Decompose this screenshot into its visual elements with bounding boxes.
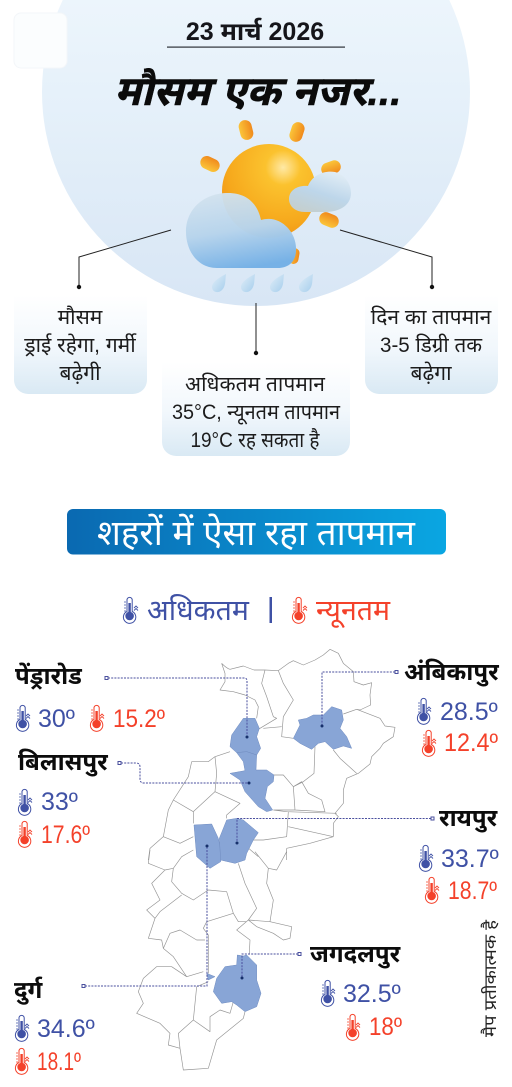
date underline bbox=[167, 46, 345, 48]
connector: Raipur bbox=[236, 817, 434, 844]
left pointer bbox=[77, 230, 171, 289]
panel: right note: बढ़ेगा bbox=[410, 361, 452, 385]
city: Raipur: 33.7º bbox=[441, 845, 499, 873]
map disclaimer: मैप प्रतीकात्मक है bbox=[479, 919, 500, 1037]
panel: left note: बढ़ेगी bbox=[59, 361, 101, 385]
city: Jagdalpur bbox=[310, 941, 402, 1041]
district: Pendra Road bbox=[230, 718, 261, 755]
district: Durg bbox=[194, 824, 222, 868]
city: Jagdalpur: जगदलपुर bbox=[310, 941, 401, 969]
center pointer bbox=[254, 303, 258, 355]
city: Pendra Road: 30º bbox=[38, 705, 75, 733]
city: Bilaspur bbox=[18, 748, 108, 849]
city: Pendra Road: पेंड्रारोड bbox=[15, 662, 82, 690]
district: Bilaspur bbox=[230, 752, 274, 812]
panel: center note: अधिकतम तापमान bbox=[185, 372, 325, 396]
big cloud bbox=[186, 193, 296, 268]
city: Durg: 34.6º bbox=[37, 1015, 95, 1043]
city: Ambikapur: 28.5º bbox=[440, 698, 498, 726]
district: Raipur bbox=[219, 818, 258, 863]
panel: center note: 19°C रह सकता है bbox=[190, 427, 320, 452]
city: Bilaspur: 33º bbox=[41, 788, 78, 816]
connector: Durg bbox=[82, 844, 208, 988]
panel: left note: ड्राई रहेगा, गर्मी bbox=[23, 333, 137, 357]
legend: न्यूनतम bbox=[316, 595, 391, 628]
faint rounded square bbox=[14, 13, 67, 68]
city: Jagdalpur: 32.5º bbox=[343, 980, 401, 1008]
panel: right note: 3-5 डिग्री तक bbox=[380, 333, 483, 357]
city: Bilaspur: 17.6º bbox=[41, 821, 90, 849]
city: Durg: 18.1º bbox=[37, 1048, 81, 1076]
map: Chhattisgarh districts bbox=[137, 649, 395, 1070]
panel: right note: दिन का तापमान bbox=[371, 305, 492, 329]
sun bbox=[222, 144, 316, 238]
city: Raipur: रायपुर bbox=[439, 805, 498, 833]
city: Durg: दुर्ग bbox=[14, 976, 43, 1005]
right pointer bbox=[340, 230, 434, 289]
sun rays bbox=[198, 119, 343, 265]
city: Jagdalpur: 18º bbox=[369, 1013, 402, 1041]
panel: center note: 35°C, न्यूनतम तापमान bbox=[172, 401, 340, 425]
title: मौसम एक नजर... bbox=[114, 68, 402, 114]
district: Jagdalpur bbox=[207, 955, 261, 1012]
city: Pendra Road: 15.2º bbox=[113, 705, 165, 733]
city: Raipur bbox=[419, 805, 499, 905]
rain drops bbox=[212, 274, 313, 292]
district: Ambikapur bbox=[293, 707, 352, 749]
icon: sun behind clouds with rain bbox=[186, 119, 351, 292]
connector: Jagdalpur bbox=[240, 952, 301, 980]
date: 23 मार्च 2026 bbox=[186, 17, 324, 46]
connector: Ambikapur bbox=[320, 670, 398, 728]
legend: अधिकतम bbox=[147, 594, 250, 627]
legend bbox=[123, 594, 391, 628]
city: Pendra Road bbox=[15, 662, 165, 733]
city: Durg bbox=[14, 976, 95, 1076]
panel: right note bbox=[365, 295, 498, 394]
background circle bbox=[42, 0, 470, 306]
city: Ambikapur: अंबिकापुर bbox=[404, 658, 499, 687]
small cloud bbox=[289, 172, 351, 212]
banner heading: शहरों में ऐसा रहा तापमान bbox=[97, 513, 416, 553]
connector: Pendra Road bbox=[105, 676, 248, 738]
panel: left note bbox=[14, 295, 147, 394]
connector: Bilaspur bbox=[118, 762, 250, 784]
city: Bilaspur: बिलासपुर bbox=[18, 748, 108, 777]
panel: left note: मौसम bbox=[58, 305, 103, 329]
city: Ambikapur: 12.4º bbox=[444, 729, 498, 757]
city: Ambikapur bbox=[404, 658, 499, 757]
panel: center note bbox=[162, 362, 350, 456]
city: Raipur: 18.7º bbox=[448, 877, 497, 905]
